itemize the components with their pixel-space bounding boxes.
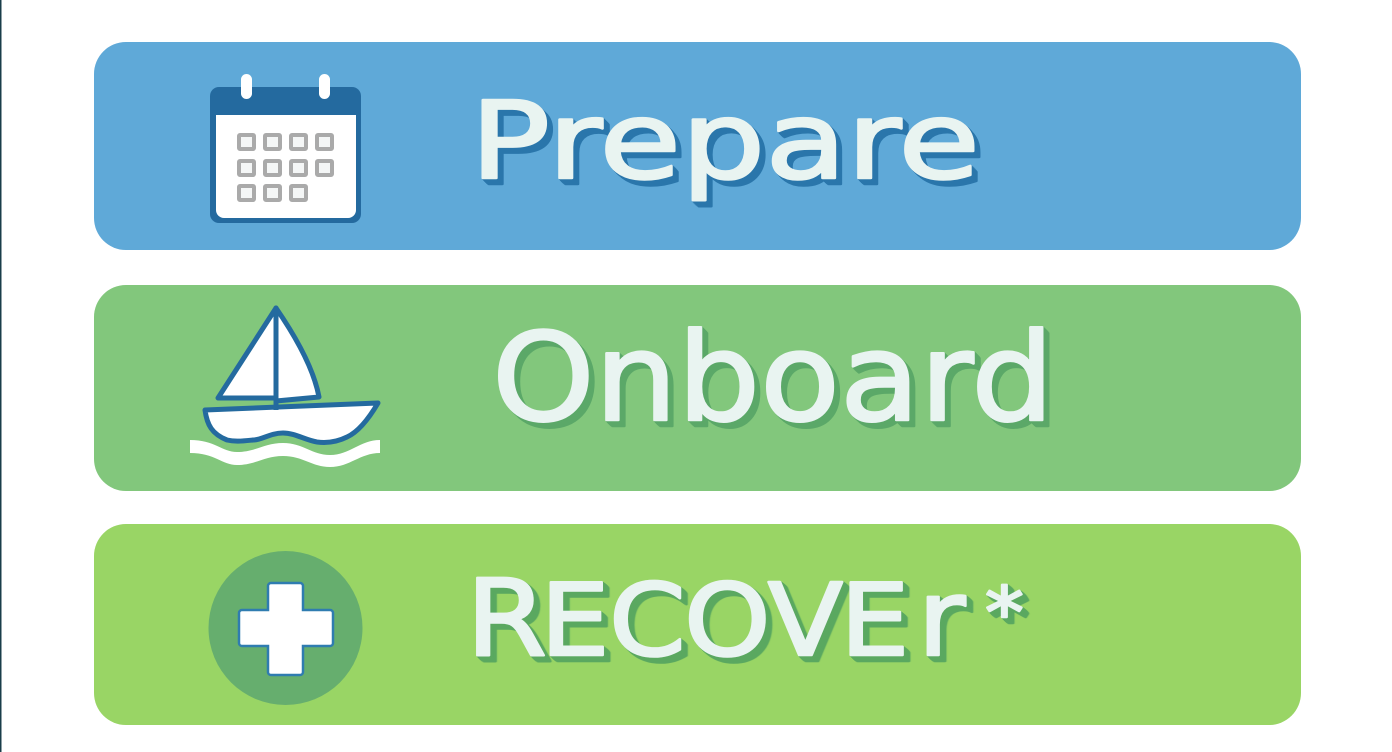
heading: Recover*: R	[466, 558, 547, 681]
icon: medical cross	[208, 551, 362, 705]
panel background: Prepare	[94, 42, 1301, 250]
heading: Recover*: *	[985, 573, 1024, 654]
panel: Prepare	[94, 42, 1301, 250]
panel: Onboard	[94, 285, 1301, 491]
panel background: Onboard	[94, 285, 1301, 491]
icon: sailboat	[190, 308, 380, 467]
heading: Prepare: Prepare	[470, 80, 980, 204]
panel: Recover	[94, 524, 1301, 725]
heading: Recover*: ECOVE	[540, 562, 909, 679]
panel background: Recover	[94, 524, 1301, 725]
icon: calendar	[210, 74, 361, 223]
heading: Onboard: Onboard	[492, 307, 1054, 449]
heading: Recover*: r	[917, 558, 966, 681]
